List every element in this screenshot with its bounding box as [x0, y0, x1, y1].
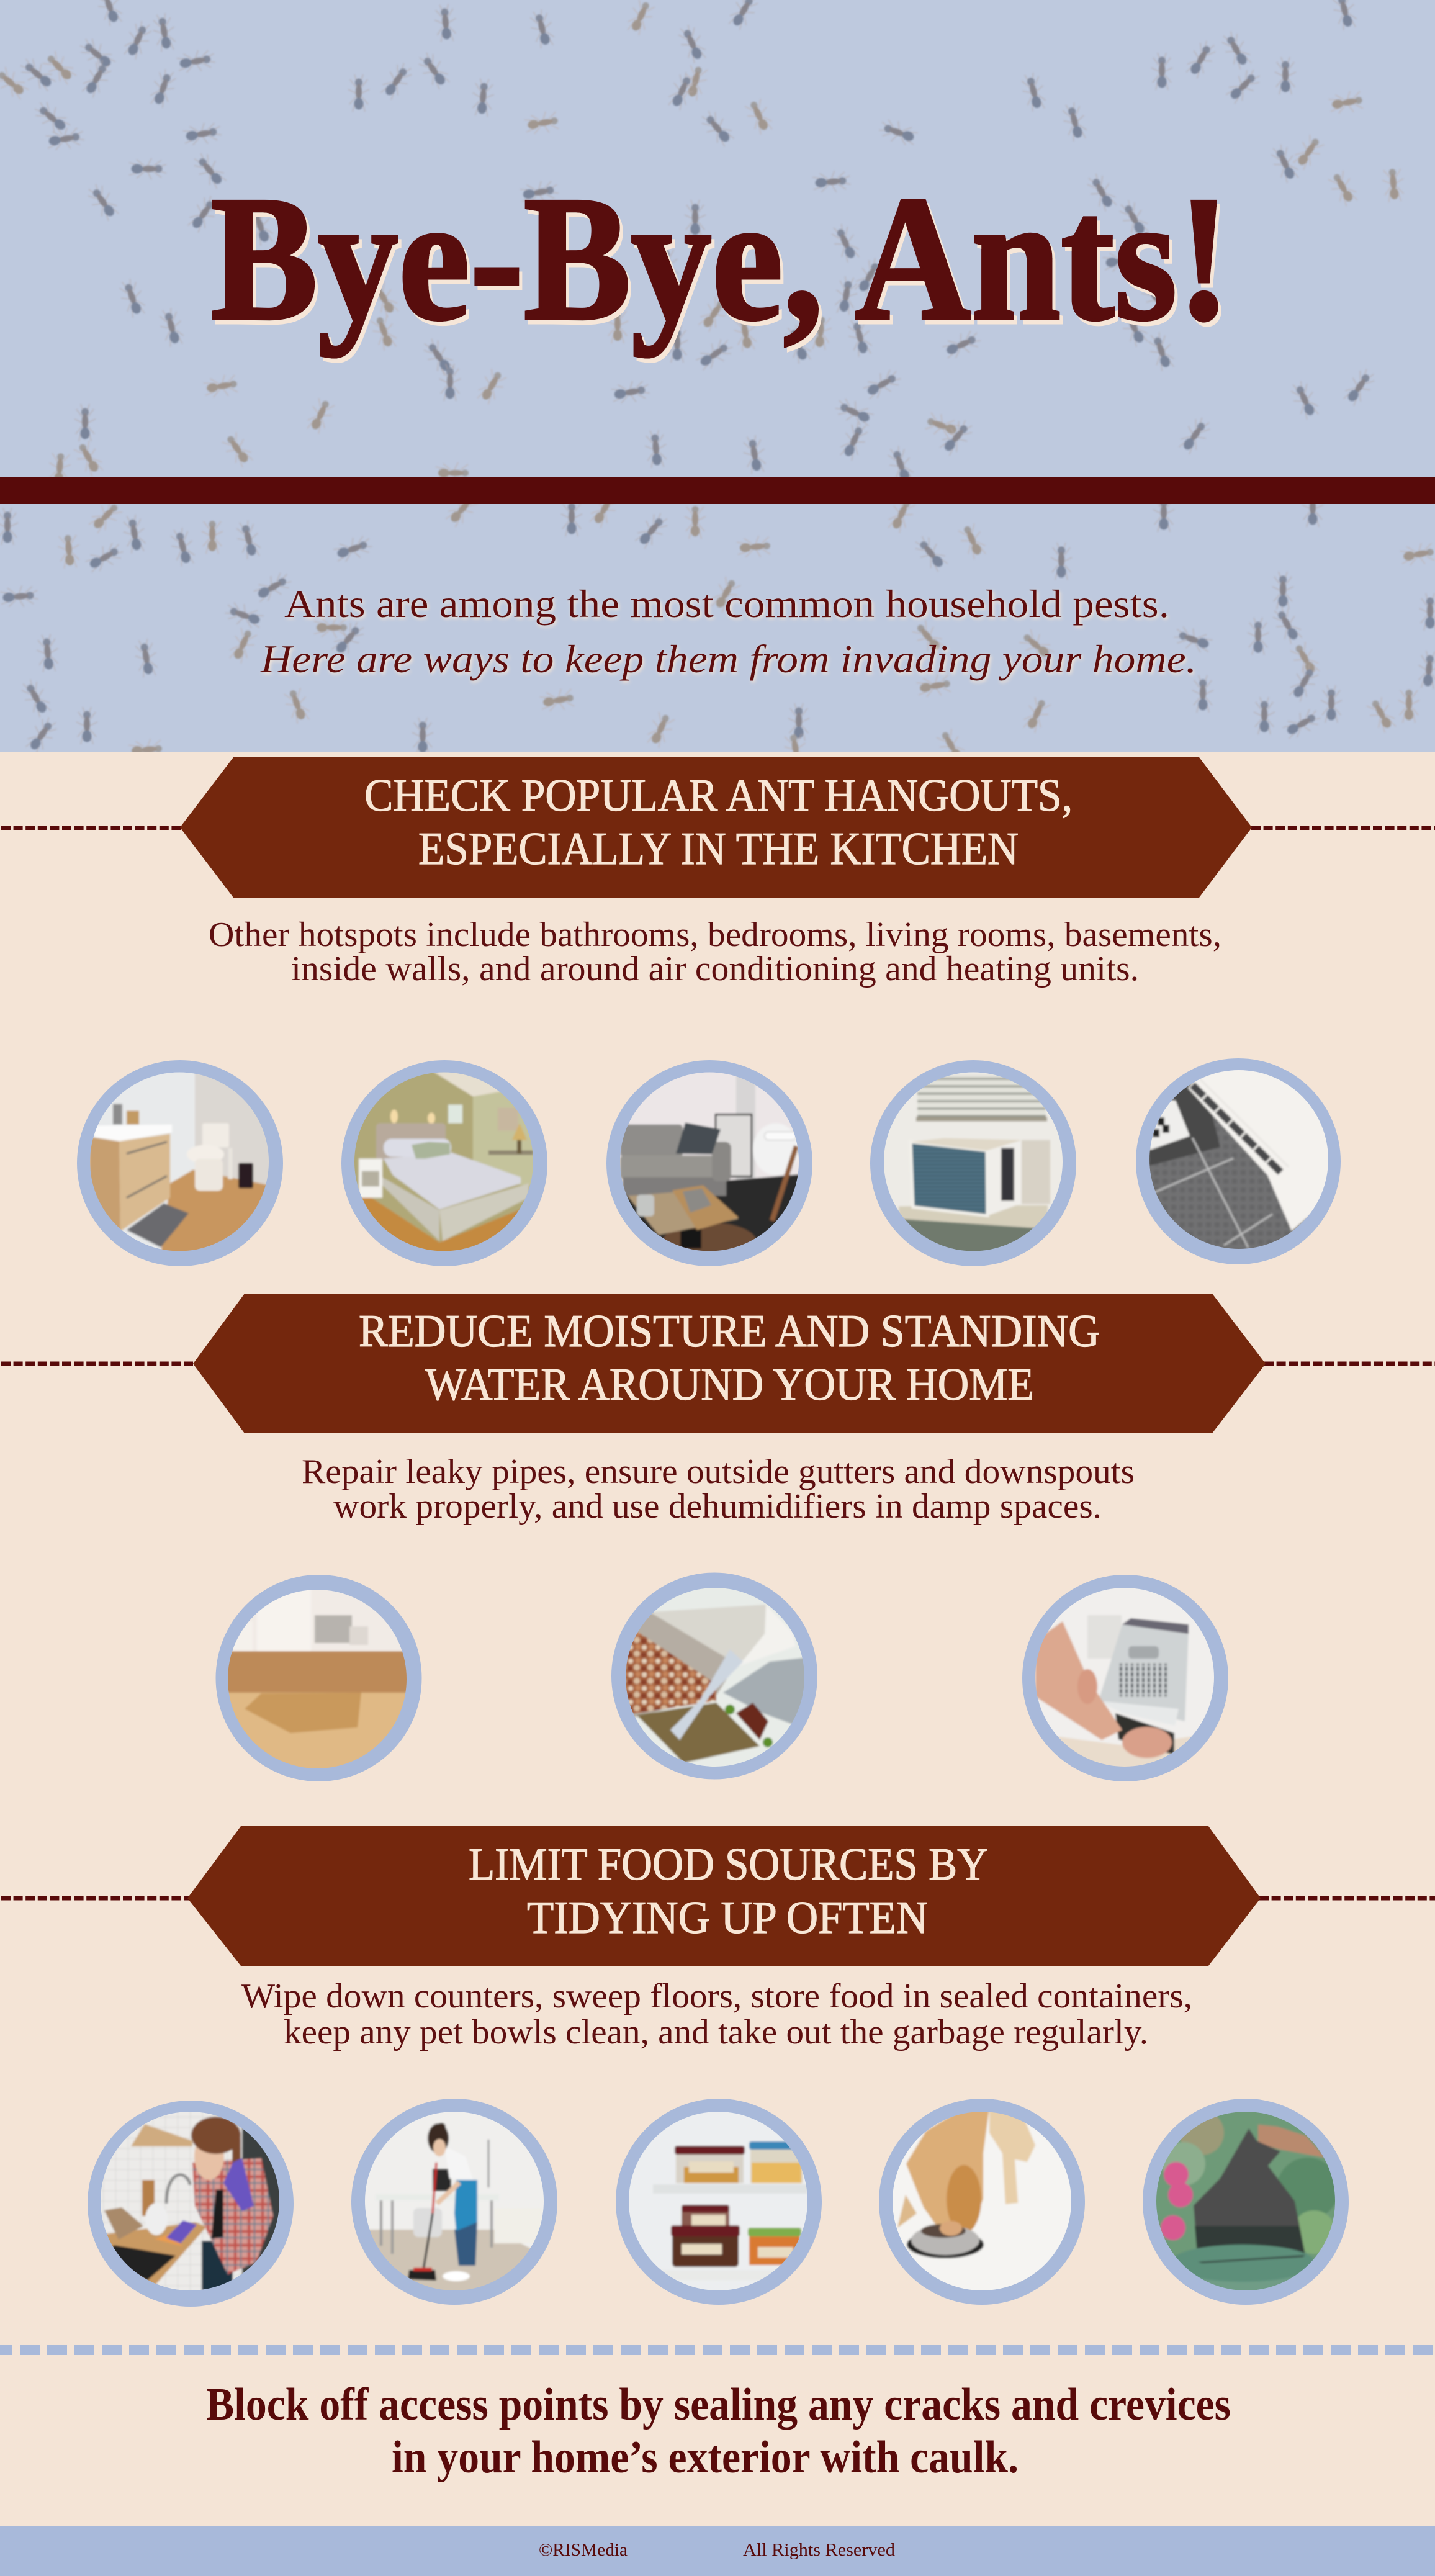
section 1 text: Other hotspots include bathrooms, bedrooms, living rooms, basements, — [209, 916, 1221, 954]
photo: water flowing from a gutter — [611, 1573, 817, 1779]
section 2 text: Repair leaky pipes, ensure outside gutters and downspouts — [302, 1452, 1135, 1491]
photo: bathroom — [77, 1060, 283, 1266]
section 2 banner: WATER AROUND YOUR HOME — [425, 1359, 1034, 1410]
title: Bye-Bye, Ants! — [210, 160, 1231, 358]
section 1 text: inside walls, and around air conditioning and heating units. — [291, 950, 1139, 988]
section 2 banner: REDUCE MOISTURE AND STANDING — [359, 1306, 1100, 1357]
maroon band — [0, 477, 1435, 504]
section 2 text: work properly, and use dehumidifiers in damp spaces. — [333, 1487, 1102, 1526]
header panel — [0, 0, 1435, 769]
photo: wiping counters — [88, 2101, 294, 2307]
section 1 banner — [1, 757, 1435, 898]
photo: sealed food containers — [616, 2099, 822, 2305]
closing message: in your home’s exterior with caulk. — [392, 2432, 1019, 2483]
section 1 banner: CHECK POPULAR ANT HANGOUTS, — [364, 770, 1073, 821]
section 3 text — [241, 1977, 1192, 2051]
footer — [0, 2526, 1435, 2576]
section 1 banner: ESPECIALLY IN THE KITCHEN — [418, 824, 1019, 875]
photo: window air conditioner — [870, 1060, 1076, 1266]
intro text: Ants are among the most common household pests. — [284, 582, 1169, 626]
ant pattern — [0, 0, 1435, 769]
header background — [0, 0, 1435, 752]
closing message — [206, 2379, 1231, 2483]
photo: dehumidifier — [1022, 1575, 1228, 1781]
intro text: Here are ways to keep them from invading your home. — [260, 637, 1197, 681]
section 3 banner: TIDYING UP OFTEN — [527, 1893, 928, 1943]
section 3 banner — [1, 1826, 1435, 1966]
section 3 text: Wipe down counters, sweep floors, store food in sealed containers, — [241, 1977, 1192, 2015]
photo: sweeping the floor — [351, 2099, 557, 2305]
section 1 text — [209, 916, 1221, 988]
section 3 text: keep any pet bowls clean, and take out the garbage regularly. — [284, 2013, 1148, 2051]
photo: bedroom — [341, 1060, 547, 1266]
photo: leaky radiator pipe — [216, 1575, 422, 1781]
section 2 banner — [1, 1294, 1435, 1433]
footer: All Rights Reserved — [743, 2541, 895, 2560]
footer: ©RISMedia — [539, 2541, 628, 2560]
photo: dog at a pet bowl — [879, 2099, 1085, 2305]
section 3 banner: LIMIT FOOD SOURCES BY — [469, 1839, 988, 1890]
intro text — [260, 582, 1197, 681]
blue dashed divider — [0, 2345, 1435, 2355]
photo: garbage bag — [1143, 2099, 1349, 2305]
photo: living room — [606, 1060, 812, 1266]
photo: wall heating unit — [1136, 1058, 1341, 1264]
section 2 text — [302, 1452, 1135, 1526]
closing message: Block off access points by sealing any cracks and crevices — [206, 2379, 1231, 2430]
